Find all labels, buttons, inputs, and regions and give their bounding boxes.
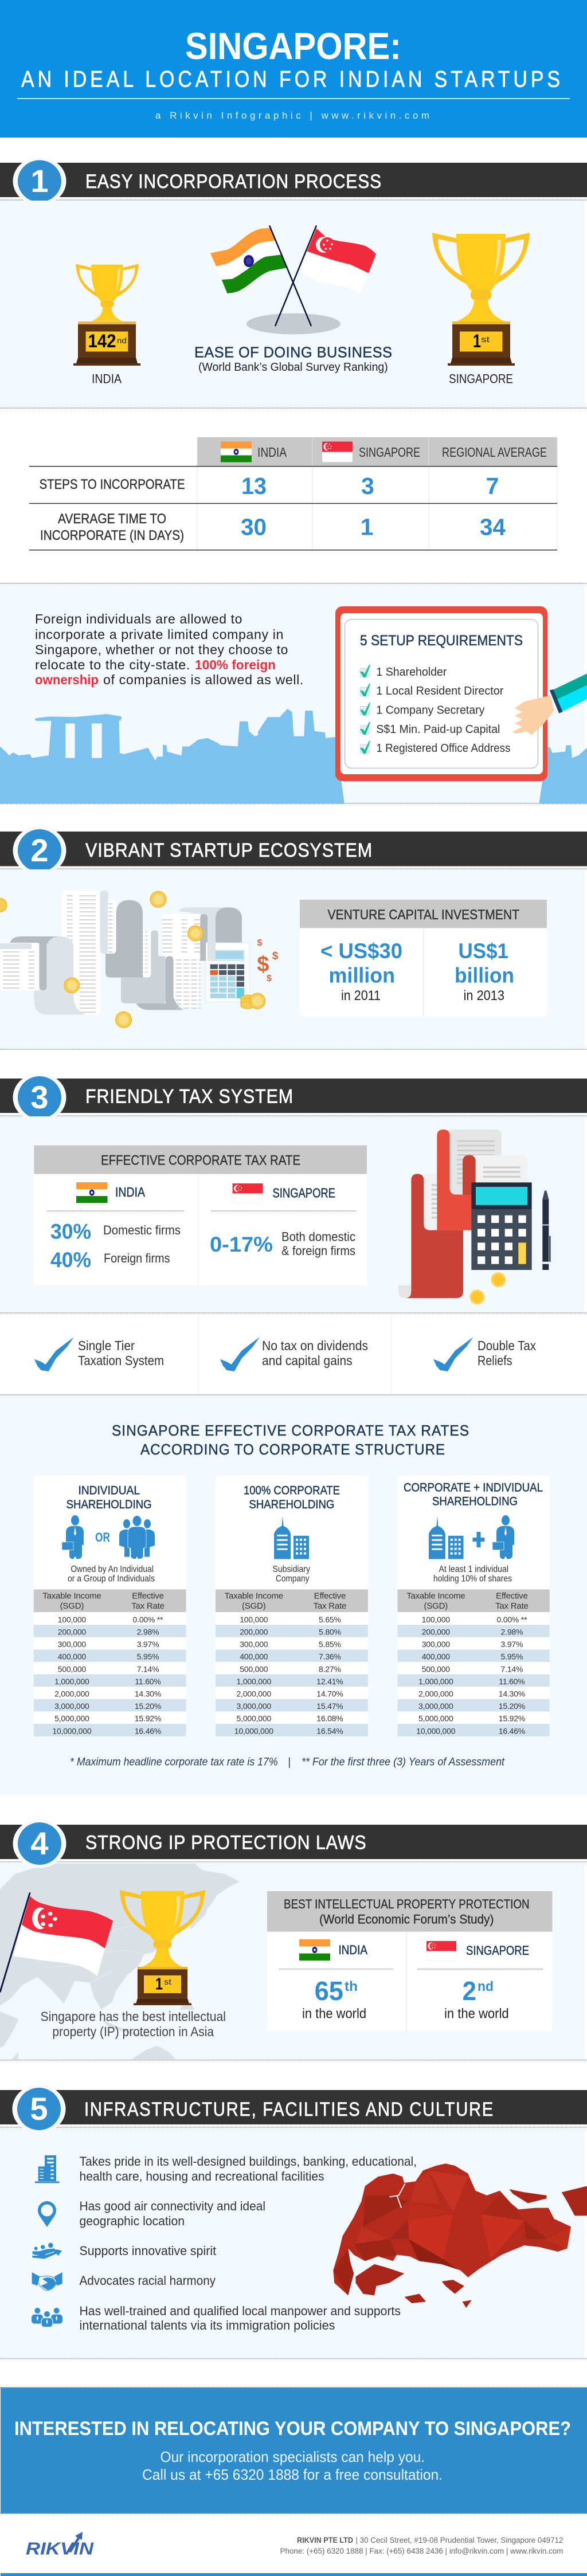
section 2 heading bar	[0, 826, 587, 875]
table: individual rates: 11.60%	[135, 1677, 161, 1686]
table: IP protection ranking: INDIA	[338, 1943, 367, 1957]
icon: Singapore trophy: st	[481, 335, 490, 344]
footer bar	[1, 2573, 587, 2576]
table: combined rates: 2,000,000	[418, 1689, 453, 1699]
table: corporate rates: 5.85%	[319, 1640, 341, 1649]
table: individual rates: 500,000	[58, 1664, 86, 1673]
section 1 heading bar: EASY INCORPORATION PROCESS	[85, 171, 382, 193]
item: harmony	[32, 2272, 216, 2291]
table: corporate rates: 2,000,000	[237, 1689, 271, 1699]
item: location	[38, 2199, 265, 2228]
icon: buildings plus person	[429, 1515, 514, 1559]
card: individual shareholding: SHAREHOLDING	[66, 1498, 152, 1511]
table: combined rates: 300,000	[422, 1640, 450, 1649]
table: IP protection ranking: th	[345, 1979, 358, 1994]
logo: Rikvin: RIKVIN	[26, 2538, 94, 2558]
card: corporate + individual shareholding: CORPORATE + INDIVIDUAL	[404, 1481, 543, 1494]
panel: ease of doing business	[0, 201, 587, 408]
table: individual rates: 7.14%	[137, 1664, 159, 1673]
item: location: Has good air connectivity and ideal	[79, 2199, 265, 2213]
heading: effective tax rates: SINGAPORE EFFECTIVE CORPORATE TAX RATES	[112, 1422, 469, 1439]
table: IP protection ranking: (World Economic Forum’s Study)	[319, 1912, 494, 1927]
table: corporate rates: 400,000	[240, 1652, 268, 1661]
table: combined rates: 15.92%	[499, 1714, 525, 1723]
card: 5 setup requirements: S$1 Min. Paid-up Capital	[376, 723, 500, 736]
table: individual rates: 5.95%	[137, 1652, 159, 1661]
table: effective corporate tax rate: INDIA	[115, 1185, 146, 1199]
icon: buildings	[274, 1516, 309, 1559]
card: corporate + individual shareholding: holding 10% of shares	[433, 1574, 512, 1584]
footer contact details: RIKVIN PTE LTD	[297, 2535, 353, 2544]
table: combined rates: 5.95%	[501, 1652, 523, 1661]
table: IP protection ranking: BEST INTELLECTUAL PROPERTY PROTECTION	[284, 1897, 530, 1911]
table: incorporation comparison: 3	[361, 473, 374, 499]
table: individual rates: 1,000,000	[54, 1677, 89, 1686]
card: 5 setup requirements: 1 Registered Office Address	[376, 742, 510, 755]
map: Asia	[0, 1864, 240, 2060]
table: incorporation comparison	[29, 437, 557, 550]
table: combined rates	[398, 1589, 550, 1736]
skyline	[0, 709, 587, 803]
table: corporate rates: 300,000	[240, 1640, 268, 1649]
table: incorporation comparison: 30	[241, 513, 267, 540]
section 2 heading bar: 2	[30, 832, 49, 868]
table: corporate rates: Effective	[314, 1591, 346, 1601]
section 2 heading bar: VIBRANT STARTUP ECOSYSTEM	[85, 840, 373, 861]
table: corporate rates	[216, 1589, 368, 1736]
table: corporate rates: 10,000,000	[234, 1726, 273, 1735]
table: corporate rates: 7.36%	[319, 1652, 341, 1661]
caption: world bank ranking: (World Bank’s Global Survey Ranking)	[198, 361, 388, 374]
item: buildings: Takes pride in its well-designed buildings, banking, educational,	[79, 2154, 417, 2169]
footnote: * Maximum headline corporate tax rate is 17%	[70, 1756, 278, 1768]
table: corporate rates: Taxable Income	[225, 1591, 283, 1601]
item: location: geographic location	[79, 2214, 185, 2228]
call to action: Call us at +65 6320 1888 for a free consultation.	[142, 2466, 443, 2483]
table: corporate rates: 14.70%	[316, 1689, 343, 1699]
table: corporate rates: 1,000,000	[237, 1677, 271, 1686]
table: effective corporate tax rate	[34, 1146, 367, 1285]
table: effective corporate tax rate: 30%	[50, 1220, 91, 1244]
benefit: double tax reliefs: Double Tax	[478, 1338, 536, 1353]
item: buildings: health care, housing and recreational facilities	[79, 2169, 324, 2183]
section 5 heading bar	[0, 2090, 587, 2127]
card: corporate + individual shareholding	[398, 1475, 550, 1736]
table: IP protection ranking: SINGAPORE	[466, 1943, 529, 1958]
table: effective corporate tax rate: SINGAPORE	[273, 1186, 335, 1201]
benefit: no tax on dividends: and capital gains	[262, 1353, 353, 1368]
table: incorporation comparison: SINGAPORE	[359, 445, 420, 460]
table: combined rates: 0.00% **	[496, 1615, 527, 1624]
table: incorporation comparison: 13	[241, 473, 267, 499]
table: individual rates: (SGD)	[60, 1601, 84, 1611]
table: combined rates: Effective	[496, 1591, 528, 1601]
benefit: no tax on dividends: No tax on dividends	[262, 1338, 368, 1353]
table: IP protection ranking: 2	[463, 1976, 476, 2006]
text: best IP in Asia: Singapore has the best intellectual	[40, 2009, 226, 2024]
table: corporate rates: 500,000	[240, 1664, 268, 1673]
icon: India trophy: nd	[117, 336, 127, 345]
table: combined rates: 7.14%	[501, 1664, 523, 1673]
text: foreign ownership paragraph: incorporate a private limited company in	[35, 627, 284, 642]
table: individual rates: Effective	[132, 1591, 164, 1601]
icon: dollar signs: $	[267, 974, 272, 983]
table: corporate rates: 5.65%	[319, 1615, 341, 1624]
table: venture capital investment: VENTURE CAPITAL INVESTMENT	[328, 907, 519, 923]
card: corporate + individual shareholding: SHAREHOLDING	[432, 1495, 518, 1508]
table: incorporation comparison: AVERAGE TIME TO	[58, 511, 166, 527]
icon: Singapore trophy	[432, 233, 530, 366]
item: innovation: Supports innovative spirit	[79, 2244, 216, 2258]
table: combined rates: Tax Rate	[495, 1601, 529, 1611]
table: individual rates: 5,000,000	[54, 1714, 89, 1723]
footer contact details: | 30 Cecil Street, #19-08 Prudential Tower, Singapore 049712	[355, 2535, 563, 2544]
table: venture capital investment: million	[329, 964, 395, 987]
table: venture capital investment: US$1	[459, 939, 508, 963]
table: incorporation comparison: STEPS TO INCORPORATE	[40, 477, 185, 492]
footnote	[70, 1756, 505, 1768]
table: venture capital investment: in 2011	[341, 988, 381, 1003]
text: foreign ownership paragraph: Singapore, whether or not they choose to	[35, 642, 288, 657]
table: individual rates: 100,000	[58, 1615, 86, 1624]
icon: individual or group: OR	[95, 1530, 110, 1544]
panel: effective tax rates by structure	[0, 1395, 587, 1795]
table: effective corporate tax rate: Domestic firms	[103, 1223, 181, 1237]
text: foreign ownership paragraph: of companies is allowed as well.	[103, 672, 304, 687]
label: Singapore: SINGAPORE	[449, 371, 513, 386]
title: SINGAPORE:	[185, 25, 401, 67]
table: IP protection ranking: in the world	[302, 2006, 366, 2022]
section 4 number badge and heading: STRONG IP PROTECTION LAWS	[85, 1832, 367, 1854]
panel: vibrant startup ecosystem	[0, 869, 587, 1049]
table: IP protection ranking: 65	[315, 1976, 343, 2006]
item: harmony: Advocates racial harmony	[79, 2273, 216, 2288]
icon: trophy first place: 1	[155, 1975, 163, 1994]
panel: strong IP protection laws	[0, 1863, 587, 2060]
table: incorporation comparison: 7	[486, 473, 499, 499]
footnote: ** For the first three (3) Years of Assessment	[302, 1756, 505, 1768]
section 3 heading bar: 3	[30, 1079, 49, 1115]
text: foreign ownership paragraph: Foreign individuals are allowed to	[35, 611, 242, 626]
table: venture capital investment: < US$30	[320, 939, 402, 963]
card: corporate + individual shareholding: At least 1 individual	[439, 1565, 508, 1574]
table: individual rates: Taxable Income	[42, 1591, 101, 1601]
footer contact details	[280, 2535, 563, 2555]
table: IP protection ranking: in the world	[444, 2006, 509, 2022]
panel: friendly tax system	[0, 1116, 587, 1313]
map: Singapore low-poly	[333, 2163, 587, 2308]
icon: dollar signs	[257, 938, 279, 983]
table: combined rates: 14.30%	[499, 1689, 525, 1699]
section 1 heading bar	[0, 157, 587, 205]
card: 5 setup requirements: 1 Company Secretary	[376, 704, 484, 716]
text: foreign ownership paragraph: ownership	[35, 672, 99, 687]
section 5 number badge and heading	[13, 2085, 494, 2133]
card: individual shareholding: Owned by An Individual	[71, 1565, 154, 1574]
table: effective corporate tax rate: EFFECTIVE CORPORATE TAX RATE	[101, 1153, 300, 1168]
benefit: single tier: Single Tier	[78, 1338, 135, 1353]
table: IP protection ranking: nd	[478, 1979, 494, 1994]
table: corporate rates: 15.47%	[316, 1701, 343, 1711]
benefit: single tier: Taxation System	[78, 1353, 164, 1368]
table: individual rates: 2,000,000	[54, 1689, 89, 1699]
heading: effective tax rates: ACCORDING TO CORPORATE STRUCTURE	[140, 1441, 445, 1458]
table: effective corporate tax rate: 40%	[50, 1248, 91, 1272]
table: corporate rates: 3,000,000	[237, 1701, 271, 1711]
table: combined rates: 500,000	[422, 1664, 450, 1673]
card: 100% corporate shareholding: Company	[276, 1574, 310, 1584]
table: corporate rates: 8.27%	[319, 1664, 341, 1673]
item: buildings	[35, 2154, 417, 2183]
icon: trophy first place	[120, 1890, 205, 2005]
icon: Singapore flag	[0, 1892, 113, 1993]
item: talent: Has well-trained and qualified local manpower and supports	[79, 2304, 401, 2318]
table: combined rates: 100,000	[422, 1615, 450, 1624]
card: 5 setup requirements: 1 Shareholder	[376, 666, 447, 679]
section 5 number badge and heading: 5	[30, 2091, 48, 2127]
table: individual rates: 200,000	[58, 1628, 86, 1637]
illustration: tax paper, calculator and pen	[398, 1130, 551, 1304]
table: individual rates	[34, 1589, 186, 1736]
table: corporate rates: (SGD)	[242, 1601, 266, 1611]
card: 100% corporate shareholding: SHAREHOLDING	[249, 1498, 334, 1511]
icon: crossed flags	[210, 226, 376, 334]
text: best IP in Asia	[40, 2009, 226, 2039]
section 3 heading bar: FRIENDLY TAX SYSTEM	[85, 1085, 294, 1107]
table: combined rates: 5,000,000	[418, 1714, 453, 1723]
text: foreign ownership paragraph: relocate to the city-state.	[35, 657, 190, 672]
table: individual rates: 400,000	[58, 1652, 86, 1661]
section 4 heading bar	[0, 1825, 587, 1862]
table: corporate rates: 200,000	[240, 1628, 268, 1637]
table: combined rates: Taxable Income	[406, 1591, 465, 1601]
icon: hand holding the card	[512, 673, 587, 735]
table: venture capital investment: billion	[455, 964, 514, 987]
table: IP protection ranking	[267, 1891, 552, 2032]
card: 5 setup requirements: 5 SETUP REQUIREMENTS	[360, 633, 523, 649]
table: individual rates: 15.20%	[135, 1701, 161, 1711]
table: individual rates: 10,000,000	[52, 1726, 92, 1735]
icon: individual or group	[62, 1515, 155, 1559]
table: individual rates: 3.97%	[137, 1640, 159, 1649]
header banner	[0, 0, 587, 138]
table: corporate rates: 16.54%	[316, 1726, 343, 1735]
card: 100% corporate shareholding	[216, 1475, 368, 1736]
table: incorporation comparison: INDIA	[257, 445, 287, 460]
table: combined rates: 3,000,000	[418, 1701, 453, 1711]
icon: trophy first place: st	[164, 1977, 171, 1986]
benefit: double tax reliefs: Reliefs	[478, 1353, 512, 1368]
table: effective corporate tax rate: Foreign firms	[104, 1251, 170, 1265]
card: 5 setup requirements	[335, 606, 547, 781]
table: corporate rates: 5,000,000	[237, 1714, 271, 1723]
table: corporate rates: 100,000	[240, 1615, 268, 1624]
table: individual rates: 3,000,000	[54, 1701, 89, 1711]
footnote: |	[288, 1756, 291, 1768]
table: effective corporate tax rate: & foreign firms	[281, 1244, 355, 1258]
icon: dollar signs: $	[257, 938, 263, 948]
icon: dollar signs: $	[272, 950, 279, 962]
icon: dollar signs: $	[257, 952, 269, 977]
table: effective corporate tax rate: Both domestic	[281, 1230, 355, 1244]
table: incorporation comparison: INCORPORATE (IN DAYS)	[40, 528, 184, 543]
table: individual rates: 0.00% **	[133, 1615, 163, 1624]
icon: India trophy	[73, 264, 140, 366]
table: incorporation comparison: 1	[361, 513, 373, 540]
table: combined rates: 2.98%	[501, 1628, 523, 1637]
section 4 number badge and heading	[13, 1819, 367, 1868]
card: individual shareholding: or a Group of Individuals	[68, 1574, 155, 1584]
table: combined rates: 16.46%	[499, 1726, 525, 1735]
table: individual rates: Tax Rate	[131, 1601, 165, 1611]
logo: Rikvin	[26, 2532, 94, 2558]
card: 100% corporate shareholding: 100% CORPORATE	[244, 1484, 340, 1497]
section 1 heading bar: 1	[30, 163, 49, 199]
table: corporate rates: 5.80%	[319, 1628, 341, 1637]
card: 100% corporate shareholding: Subsidiary	[273, 1565, 310, 1574]
call to action: Our incorporation specialists can help you.	[161, 2448, 425, 2465]
item: innovation	[32, 2243, 216, 2259]
icon: Singapore trophy: 1	[473, 331, 481, 351]
label: India: INDIA	[92, 371, 122, 386]
icon: India trophy: 142	[88, 331, 116, 351]
card: individual shareholding	[34, 1475, 186, 1736]
heading: ease of doing business: EASE OF DOING BUSINESS	[194, 344, 392, 361]
benefit: single tier	[34, 1337, 164, 1371]
footer contact details: Phone: (+65) 6320 1888 | Fax: (+65) 6438 2436 | info@rikvin.com | www.rikvin.com	[280, 2546, 563, 2555]
table: combined rates: 3.97%	[501, 1640, 523, 1649]
call to action	[0, 2387, 587, 2514]
text: best IP in Asia: property (IP) protection in Asia	[52, 2024, 214, 2039]
section 5 number badge and heading: INFRASTRUCTURE, FACILITIES AND CULTURE	[84, 2099, 494, 2120]
table: combined rates: 11.60%	[499, 1677, 525, 1686]
table: incorporation comparison: 34	[480, 513, 506, 540]
benefit: no tax on dividends	[220, 1337, 368, 1371]
text: foreign ownership paragraph: 100% foreign	[195, 657, 276, 672]
table: individual rates: 300,000	[58, 1640, 86, 1649]
table: effective corporate tax rate: 0-17%	[210, 1233, 273, 1256]
card: 5 setup requirements: 1 Local Resident Director	[376, 685, 504, 697]
benefit: double tax reliefs	[433, 1337, 536, 1371]
table: combined rates: (SGD)	[424, 1601, 448, 1611]
table: corporate rates: 16.08%	[316, 1714, 343, 1723]
table: combined rates: 400,000	[422, 1652, 450, 1661]
table: combined rates: 10,000,000	[416, 1726, 456, 1735]
table: venture capital investment: in 2013	[464, 988, 504, 1003]
illustration: receipts, coins and calculator	[0, 891, 265, 1028]
table: combined rates: 200,000	[422, 1628, 450, 1637]
table: corporate rates: Tax Rate	[314, 1601, 346, 1611]
card: individual shareholding: INDIVIDUAL	[78, 1484, 140, 1497]
panel: foreign ownership and setup requirements	[0, 583, 587, 803]
byline: a Rikvin Infographic | www.rikvin.com	[155, 110, 429, 121]
table: corporate rates: 12.41%	[316, 1677, 343, 1686]
heading: effective tax rates	[112, 1422, 469, 1458]
item: talent: international talents via its immigration policies	[79, 2318, 335, 2332]
table: individual rates: 16.46%	[135, 1726, 161, 1735]
section 3 heading bar	[0, 1073, 587, 1122]
panel: infrastructure, facilities and culture	[0, 2128, 587, 2359]
item: talent	[32, 2304, 401, 2332]
text: foreign ownership paragraph	[35, 611, 304, 687]
table: incorporation comparison: REGIONAL AVERAGE	[442, 445, 547, 460]
table: individual rates: 14.30%	[135, 1689, 161, 1699]
table: combined rates: 1,000,000	[418, 1677, 453, 1686]
table: individual rates: 2.98%	[137, 1628, 159, 1637]
strip: tax benefits	[0, 1315, 587, 1395]
table: venture capital investment	[300, 900, 547, 1016]
section 4 number badge and heading: 4	[30, 1825, 49, 1861]
table: individual rates: 15.92%	[135, 1714, 161, 1723]
table: combined rates: 15.20%	[499, 1701, 525, 1711]
